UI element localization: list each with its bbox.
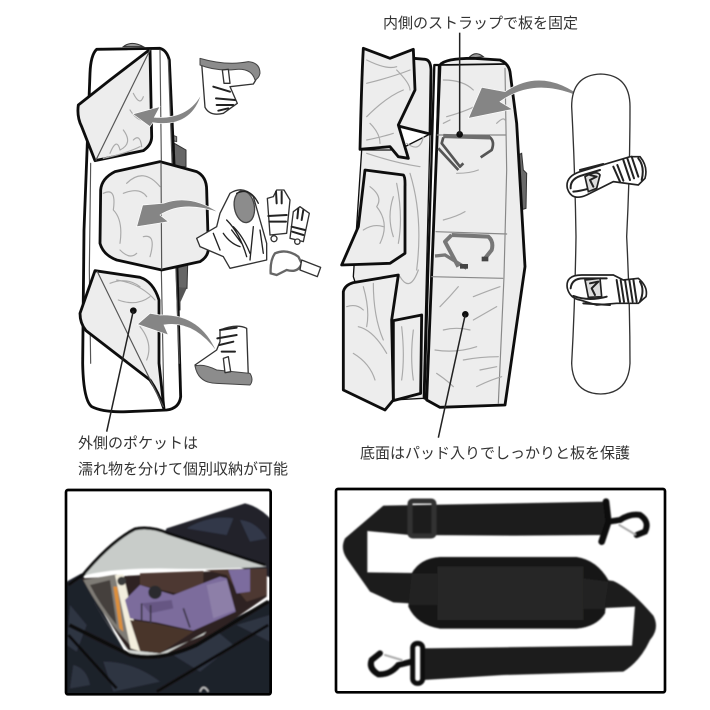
panel: photo of shoulder strap [336,489,665,692]
webbing [343,502,607,605]
callout line: padded base [438,311,469,438]
bag centre spine [424,65,439,400]
callout line: strap [456,33,463,138]
top left flap [360,48,415,158]
icon: snowboard boot, top [200,58,260,114]
illustration: bag with outer pockets open [78,43,321,432]
caption: outer pockets: 外側のポケットは [78,435,198,452]
shoulder strap on bag side [163,132,188,310]
middle left flap [342,170,405,265]
arrow into bag [468,80,586,118]
swivel hook, bottom [371,643,423,683]
icon: gloves [267,190,309,244]
panel: photo of boot pocket [63,490,273,698]
shoulder pad [408,557,608,629]
swivel hook, top [602,502,647,542]
icon: goggles [271,251,321,277]
upper inner strap [438,136,493,170]
photo frame [66,490,271,694]
upper binding [567,157,646,197]
slider buckle [410,501,434,536]
lower binding [567,275,646,305]
arrow into middle pocket [137,200,219,227]
icon: snowboard boot, bottom [195,326,252,385]
strap on right side of bag [515,153,527,212]
bag body [83,43,181,412]
snowboard [567,74,646,394]
caption: outer pockets [78,435,288,478]
caption: padded base: 底面はパッド入りでしっかりと板を保護 [360,445,630,462]
photo: bag pocket with boot inside [63,503,273,698]
bottom pocket flap [80,271,164,409]
top pocket flap [78,49,152,161]
caption: outer pockets: 濡れ物を分けて個別収納が可能 [78,461,288,478]
lower left flap [343,275,398,410]
arrow into bottom pocket [137,313,217,352]
open bag left side [353,58,431,401]
middle pocket [100,162,208,270]
icon: ski jacket [197,189,267,268]
photo: padded shoulder strap [343,501,656,683]
caption: inner straps: 内側のストラップで板を固定 [383,15,578,32]
inner padded panel [427,54,525,407]
callout line: outer pocket [107,307,137,432]
photo frame [336,489,665,692]
arrow into top pocket [133,93,202,127]
lower inner strap [435,235,492,269]
illustration: bag opened with snowboard [342,33,646,438]
